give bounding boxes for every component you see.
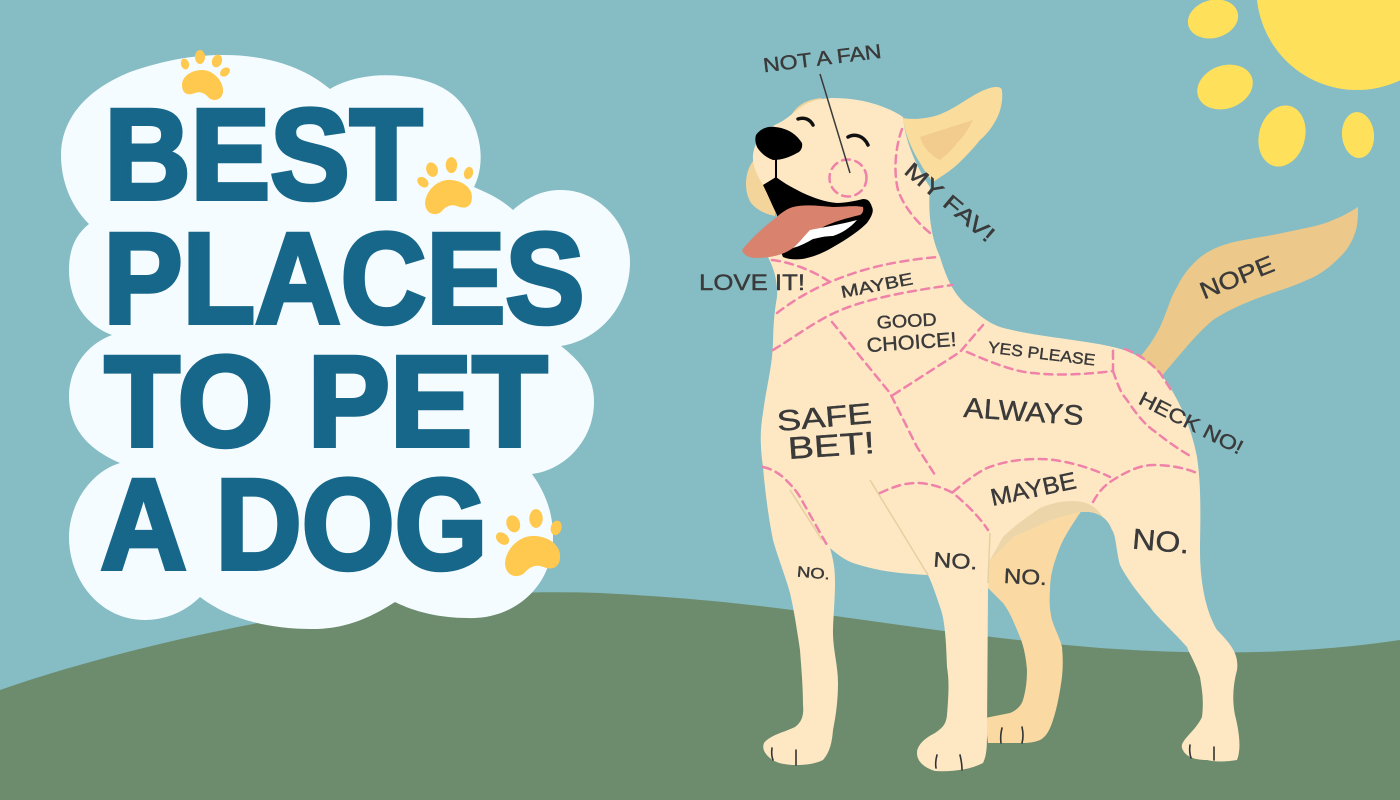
tongue (742, 205, 863, 258)
label: love it: LOVE IT! (699, 270, 805, 295)
title cloud (61, 55, 630, 629)
label: safe bet: BET! (787, 425, 876, 466)
title (100, 83, 584, 597)
inner ear (920, 120, 973, 160)
title: A DOG (100, 453, 488, 597)
leg creases (790, 480, 990, 583)
label: good choice (866, 309, 957, 357)
label: maybe neck: MAYBE (839, 269, 915, 302)
title: PLACES (104, 207, 584, 351)
belly shadow (990, 501, 1103, 560)
dog tail (1140, 207, 1358, 378)
label: maybe lower: MAYBE (988, 467, 1079, 512)
sun with rays (1183, 0, 1400, 172)
label: yes please: YES PLEASE (987, 340, 1096, 370)
label: heck no: HECK NO! (1135, 388, 1247, 459)
far hind leg (985, 510, 1082, 743)
label: safe bet: SAFE (776, 398, 873, 438)
label: no far hind leg: NO. (1003, 565, 1047, 590)
nose (755, 127, 802, 160)
toe marks (772, 727, 1214, 770)
tongue highlight (793, 220, 857, 248)
dog body (753, 98, 1239, 771)
icon: paw bottom (493, 509, 563, 576)
dog ear (903, 87, 1002, 182)
green hill (0, 592, 1400, 800)
label: not a fan: NOT A FAN (762, 41, 883, 77)
label: nope: NOPE (1196, 251, 1278, 305)
pointer line (820, 74, 850, 173)
pink dashed zones (763, 129, 1197, 545)
label: my fav: MY FAV! (900, 157, 1000, 247)
label: no near leg: NO. (933, 549, 978, 575)
label: no hind leg: NO. (1131, 524, 1191, 560)
label: good choice: CHOICE! (866, 329, 957, 357)
icon: paw top (180, 50, 232, 100)
dog illustration (742, 74, 1358, 771)
label: good choice: GOOD (876, 309, 937, 333)
eyes (798, 118, 868, 145)
label: no front leg: NO. (796, 564, 831, 583)
icon: paw middle (415, 157, 475, 214)
title: TO PET (104, 330, 548, 474)
label: always: ALWAYS (963, 392, 1085, 431)
philtrum (775, 158, 777, 178)
dog back-head tan (746, 98, 822, 216)
label: safe bet (776, 398, 876, 466)
mouth (763, 177, 873, 259)
title: BEST (104, 83, 422, 227)
